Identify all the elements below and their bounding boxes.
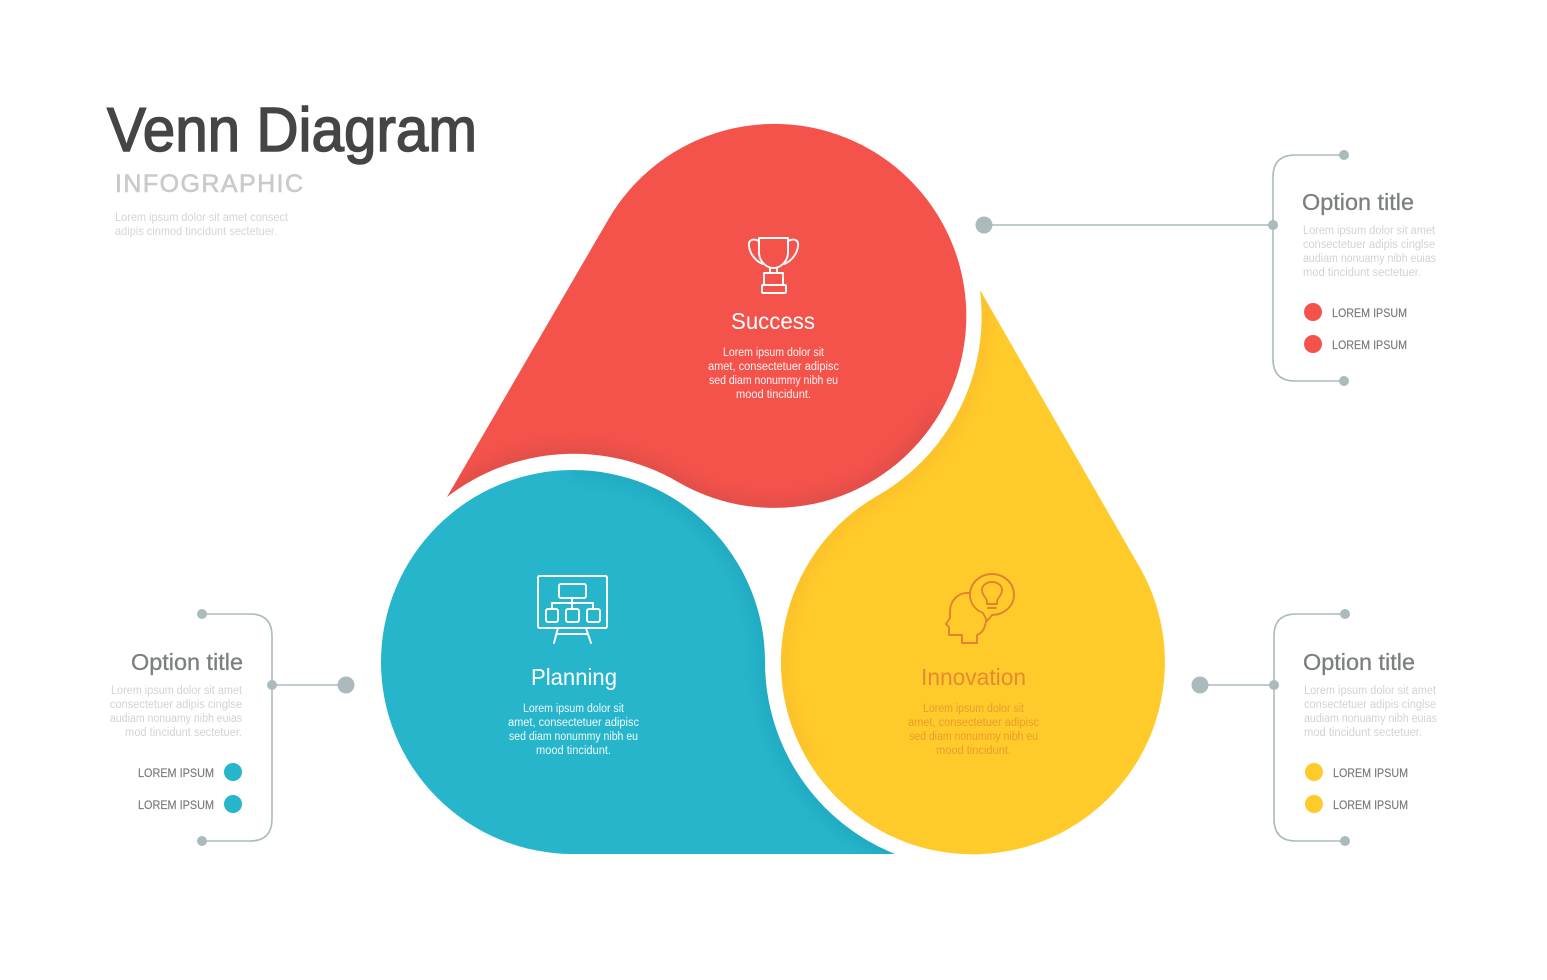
callout: top right option [976, 150, 1436, 386]
callout: top right option: audiam nonuamy nibh euias [1303, 253, 1436, 265]
intro text: adipis cinmod tincidunt sectetuer. [115, 224, 277, 238]
callout: top right option: LOREM IPSUM [1332, 306, 1407, 320]
callout: left option: audiam nonuamy nibh euias [110, 713, 242, 725]
callout: bottom right option: consectetuer adipis cinglse [1304, 699, 1436, 711]
heading: Planning: Planning [531, 664, 617, 690]
text: Innovation description: Lorem ipsum dolor sit [923, 703, 1025, 715]
callout: top right option: consectetuer adipis cinglse [1303, 239, 1435, 251]
text: Success description [708, 347, 839, 401]
callout: left option: Option title [131, 649, 243, 675]
callout: left option: LOREM IPSUM [138, 766, 214, 780]
icon: head with lightbulb [946, 574, 1014, 643]
intro text [115, 210, 289, 238]
icon: trophy [749, 238, 798, 293]
text: Innovation description: amet, consectetuer adipisc [908, 717, 1039, 729]
callout: bottom right option: audiam nonuamy nibh euias [1304, 713, 1437, 725]
text: Success description: Lorem ipsum dolor sit [723, 347, 825, 359]
callout: left option: mod tincidunt sectetuer. [125, 727, 242, 739]
callout: bottom right option [1192, 609, 1437, 846]
panel: innovation yellow shape [781, 290, 1165, 854]
callout: top right option: Option title [1302, 189, 1414, 215]
text: Innovation description: mood tincidunt. [936, 745, 1011, 757]
callout: bottom right option: LOREM IPSUM [1333, 798, 1408, 812]
text: Success description: mood tincidunt. [736, 389, 811, 401]
callout: left option: Lorem ipsum dolor sit amet [111, 685, 243, 697]
text: Success description: amet, consectetuer adipisc [708, 361, 839, 373]
callout: bottom right option: Lorem ipsum dolor sit amet [1304, 685, 1437, 697]
text: Innovation description [908, 703, 1039, 757]
panel: success red shape [447, 124, 966, 508]
callout: bottom right option: Option title [1303, 649, 1415, 675]
title: Venn Diagram [107, 96, 477, 165]
subtitle: INFOGRAPHIC [115, 170, 303, 198]
heading: Success: Success [731, 308, 815, 334]
text: Planning description: sed diam nonummy nibh eu [509, 731, 638, 743]
callout: left option [110, 609, 354, 846]
callout: left option: LOREM IPSUM [138, 798, 214, 812]
heading: Innovation: Innovation [921, 664, 1026, 690]
text: Success description: sed diam nonummy nibh eu [709, 375, 838, 387]
panel: planning blue shape [381, 470, 895, 854]
callout: top right option: mod tincidunt sectetuer. [1303, 267, 1421, 279]
text: Planning description [508, 703, 639, 757]
text: Planning description: amet, consectetuer adipisc [508, 717, 639, 729]
intro text: Lorem ipsum dolor sit amet consect [115, 210, 289, 224]
text: Innovation description: sed diam nonummy nibh eu [909, 731, 1038, 743]
text: Planning description: mood tincidunt. [536, 745, 611, 757]
icon: planning board [538, 576, 607, 643]
callout: bottom right option: mod tincidunt sectetuer. [1304, 727, 1422, 739]
callout: top right option: Lorem ipsum dolor sit amet [1303, 225, 1436, 237]
callout: top right option: LOREM IPSUM [1332, 338, 1407, 352]
callout: bottom right option: LOREM IPSUM [1333, 766, 1408, 780]
callout: left option: consectetuer adipis cinglse [110, 699, 242, 711]
text: Planning description: Lorem ipsum dolor sit [523, 703, 625, 715]
